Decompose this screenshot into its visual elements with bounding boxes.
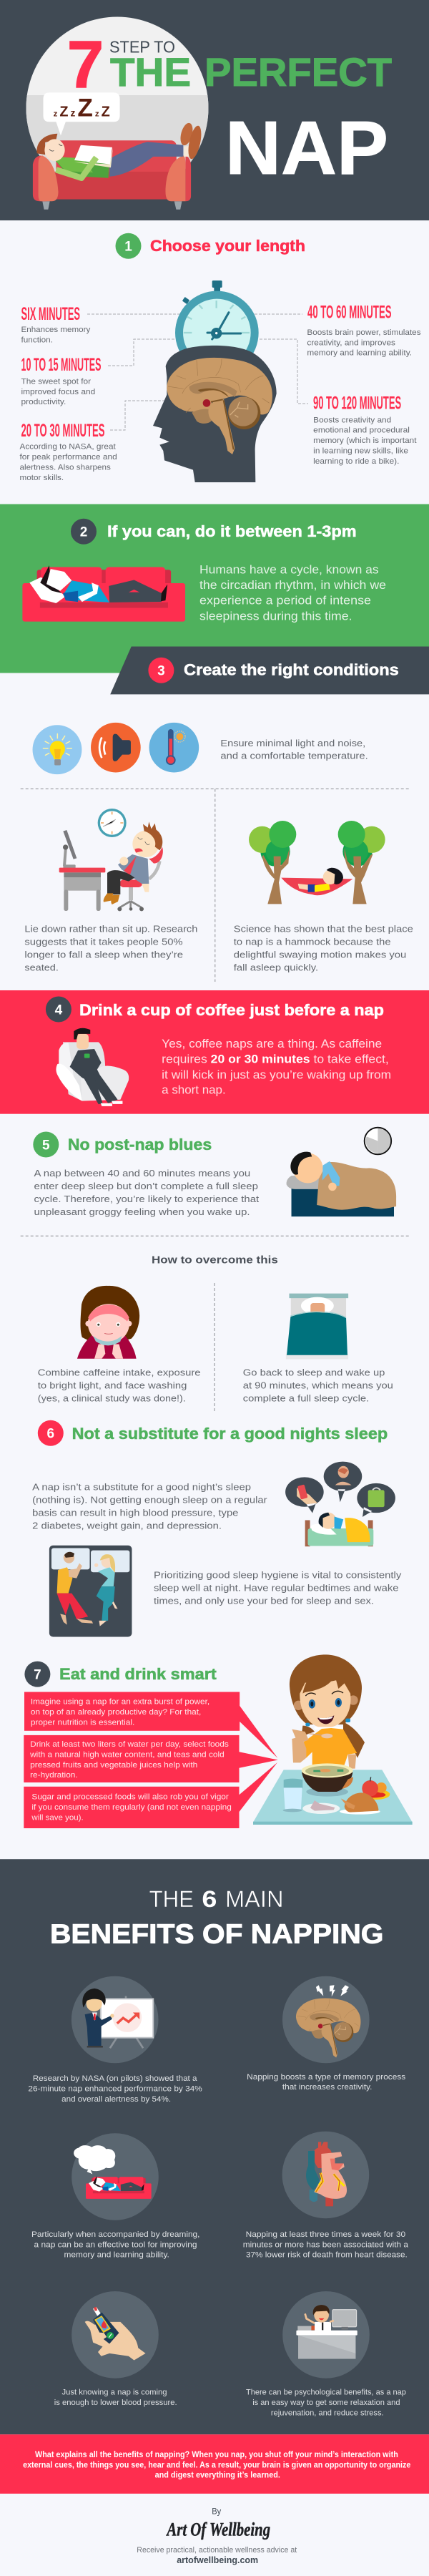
step 4 text: requires 20 or 30 minutes to take effect, bbox=[162, 1052, 389, 1066]
connector lines bbox=[87, 314, 308, 430]
benefit 6 text: rejuvenation, and reduce stress. bbox=[271, 2409, 384, 2417]
block: six minutes: function. bbox=[21, 336, 53, 344]
illustration: man napping on sofa bbox=[33, 92, 204, 210]
step 3 text: minimal light and noise: and a comfortable temperature. bbox=[220, 751, 368, 761]
block: 90 to 120 minutes: Boosts creativity and bbox=[313, 416, 391, 425]
benefit 1 text: Research by NASA (on pilots) showed that a bbox=[33, 2074, 197, 2083]
benefits title: 6 bbox=[202, 1886, 217, 1912]
benefit 3 text: Particularly when accompanied by dreaming, bbox=[31, 2230, 199, 2239]
benefit 5 text bbox=[54, 2389, 177, 2407]
block: 20 to 30 minutes: alertness. Also sharpens bbox=[20, 464, 111, 472]
benefit 4 text: Napping at least three times a week for 30 bbox=[246, 2230, 405, 2239]
benefits title: BENEFITS OF NAPPING bbox=[50, 1920, 383, 1950]
benefit 1 text: 26-minute nap enhanced performance by 34% bbox=[28, 2084, 202, 2093]
callout: sugar bbox=[24, 1762, 277, 1828]
text: back to sleep bbox=[243, 1367, 393, 1403]
step 2 text bbox=[199, 562, 386, 623]
block: 10 to 15 minutes bbox=[21, 355, 102, 406]
block: 20 to 30 minutes: According to NASA, great bbox=[20, 442, 116, 451]
benefits title bbox=[50, 1886, 383, 1950]
benefit 5 text: is enough to lower blood pressure. bbox=[54, 2399, 177, 2407]
title: the: THE bbox=[110, 49, 191, 94]
text: caffeine and face washing: Combine caffeine intake, exposure bbox=[38, 1367, 200, 1378]
header panel bbox=[0, 0, 429, 220]
footer: Art Of Wellbeing bbox=[166, 2519, 270, 2540]
text: lie down: longer to fall a sleep when they’re bbox=[24, 949, 183, 960]
callout: water bbox=[24, 1735, 278, 1782]
text: hammock: delightful swaying motion makes you bbox=[234, 949, 406, 960]
benefit 4 text: minutes or more has been associated with a bbox=[243, 2240, 409, 2249]
panel: conclusion: What explains all the benefits of napping? When you nap, you shut off your mind’s interaction with bbox=[35, 2449, 398, 2459]
block: 10 to 15 minutes: The sweet spot for bbox=[21, 378, 91, 386]
block: 40 to 60 minutes: Boosts brain power, stimulates bbox=[307, 328, 421, 337]
step 1 heading: Choose your length bbox=[150, 237, 305, 255]
step 4 heading: Drink a cup of coffee just before a nap bbox=[79, 1001, 384, 1019]
block: 10 to 15 minutes: productivity. bbox=[21, 398, 66, 406]
step 3 heading ribbon: Create the right conditions bbox=[184, 660, 399, 678]
benefit 3 text: memory and learning ability. bbox=[64, 2251, 169, 2260]
step 2 text: the circadian rhythm, in which we bbox=[199, 578, 386, 592]
callout: burst of power: on top of an already productive day? For that, bbox=[31, 1708, 201, 1717]
step 4 text: it will kick in just as you’re waking up from bbox=[162, 1068, 391, 1081]
step 7 heading bbox=[24, 1662, 217, 1687]
step 5 text: cycle. Therefore, you’re likely to experience that bbox=[34, 1194, 259, 1204]
benefit 3 text bbox=[31, 2230, 199, 2260]
step 3 heading ribbon bbox=[110, 647, 429, 694]
step 2 text: sleepiness during this time. bbox=[199, 609, 352, 623]
title: nap: NAP bbox=[225, 106, 388, 190]
step 2 text: experience a period of intense bbox=[199, 594, 371, 608]
illustration: man asleep under blanket with clock bbox=[287, 1128, 396, 1216]
text: back to sleep: Go back to sleep and wake up bbox=[243, 1367, 385, 1378]
benefit 6 icon: man at office desk bbox=[282, 2291, 370, 2379]
panel: conclusion bbox=[0, 2434, 429, 2494]
step 4 text bbox=[162, 1037, 391, 1097]
subheading: how to overcome this: How to overcome this bbox=[152, 1254, 278, 1267]
block: 20 to 30 minutes: motor skills. bbox=[20, 474, 64, 482]
icon: light bulb bbox=[33, 725, 82, 774]
footer: Receive practical, actionable wellness advice at bbox=[137, 2546, 297, 2555]
text: hammock: to nap is a hammock because the bbox=[234, 936, 390, 947]
block: 90 to 120 minutes: emotional and procedural bbox=[313, 426, 410, 435]
step 4 text: Yes, coffee naps are a thing. As caffeine bbox=[162, 1037, 382, 1050]
callout: sugar: if you consume them regularly (and not even napping bbox=[31, 1803, 232, 1812]
panel: step 2 bbox=[0, 504, 429, 673]
panel: benefits bbox=[0, 1859, 429, 2434]
title: step to: STEP TO bbox=[109, 37, 175, 56]
step 5 text: A nap between 40 and 60 minutes means you bbox=[34, 1168, 250, 1179]
benefit 4 text: 37% lower risk of death from heart disease. bbox=[246, 2251, 408, 2260]
step 3 text: minimal light and noise: Ensure minimal light and noise, bbox=[220, 738, 365, 748]
block: 40 to 60 minutes: creativity, and improves bbox=[307, 339, 396, 348]
benefit 4 text bbox=[243, 2230, 409, 2260]
step 6 text: not a substitute bbox=[32, 1481, 267, 1531]
benefit 1 text: and overall alertness by 54%. bbox=[61, 2095, 171, 2104]
benefit 6 text: There can be psychological benefits, as a nap bbox=[246, 2389, 406, 2397]
footer: By bbox=[212, 2507, 221, 2517]
step 6 heading: 6 bbox=[47, 1427, 54, 1442]
step 6 text: sleep hygiene: sleep well at night. Have regular bedtimes and wake bbox=[154, 1583, 399, 1594]
block: 40 to 60 minutes: memory and learning ability. bbox=[307, 349, 412, 358]
step 2 heading bbox=[71, 519, 357, 545]
benefit 1 icon: presenter with chart bbox=[72, 1976, 159, 2063]
benefit 2 text: Napping boosts a type of memory process bbox=[247, 2073, 406, 2082]
block: 10 to 15 minutes: 10 TO 15 MINUTES bbox=[21, 355, 102, 375]
step 6 heading: Not a substitute for a good nights sleep bbox=[72, 1425, 388, 1443]
step 6 text: not a substitute: (nothing is). Not getting enough sleep on a regular bbox=[32, 1494, 267, 1505]
illustration: man with coffee in armchair bbox=[56, 1028, 129, 1106]
hero circle bbox=[26, 17, 209, 172]
block: 90 to 120 minutes: in learning new skills, like bbox=[313, 447, 408, 456]
step 6 text: sleep hygiene: times, and only use your bed for sleep and sex. bbox=[154, 1596, 374, 1606]
benefit 6 text: is an easy way to get some relaxation and bbox=[252, 2399, 400, 2407]
text: lie down: seated. bbox=[24, 962, 59, 973]
step 4 heading: 4 bbox=[55, 1002, 63, 1018]
benefit 6 text bbox=[246, 2389, 406, 2417]
step 1 heading: 1 bbox=[124, 239, 132, 255]
illustration: woman washing face bbox=[77, 1286, 139, 1359]
benefit 2 text: that increases creativity. bbox=[282, 2083, 372, 2092]
illustration: girl eating soup at table bbox=[253, 1654, 413, 1825]
benefit 2 icon: brain with sparks bbox=[282, 1976, 370, 2063]
block: 90 to 120 minutes bbox=[313, 393, 416, 466]
text: hammock: Science has shown that the best place bbox=[234, 924, 413, 935]
block: 90 to 120 minutes: memory (which is important bbox=[313, 436, 416, 445]
speech bubble: snoring bbox=[43, 92, 120, 135]
benefits title: MAIN bbox=[225, 1886, 283, 1912]
step 6 text: not a substitute: A nap isn’t a substitute for a good night’s sleep bbox=[32, 1481, 251, 1492]
step 4 text: a short nap. bbox=[162, 1083, 226, 1097]
block: six minutes: Enhances memory bbox=[21, 326, 91, 334]
block: 40 to 60 minutes bbox=[307, 303, 421, 358]
callout: burst of power: proper nutrition is essential. bbox=[31, 1719, 134, 1727]
illustration: boy in hammock between trees bbox=[249, 821, 385, 904]
callout: burst of power: Imagine using a nap for an extra burst of power, bbox=[31, 1698, 209, 1707]
step 6 text: sleep hygiene bbox=[154, 1570, 402, 1606]
illustration: couple sleeping in bed bbox=[49, 1546, 132, 1636]
illustration: person in bed under teal blanket bbox=[286, 1294, 348, 1359]
text: lie down: suggests that it takes people 50% bbox=[24, 936, 183, 947]
block: six minutes bbox=[21, 304, 91, 344]
step 6 text: sleep hygiene: Prioritizing good sleep hygiene is vital to consistently bbox=[154, 1570, 402, 1581]
benefit 3 text: a nap can be an effective tool for improving bbox=[34, 2240, 197, 2249]
benefit 2 text bbox=[247, 2073, 406, 2092]
illustration: man asleep at desk bbox=[59, 809, 163, 911]
step 5 text bbox=[34, 1168, 259, 1217]
step 5 text: unpleasant groggy feeling when you wake up. bbox=[34, 1206, 250, 1217]
title: perfect: PERFECT bbox=[204, 49, 392, 94]
step 1 heading bbox=[116, 233, 305, 259]
callout: sugar: Sugar and processed foods will also rob you of vigor bbox=[31, 1792, 229, 1801]
text: back to sleep: at 90 minutes, which means you bbox=[243, 1380, 393, 1390]
text: lie down bbox=[24, 924, 197, 973]
step 4 heading bbox=[46, 996, 384, 1022]
step 6 heading bbox=[38, 1420, 388, 1446]
step 2 text: Humans have a cycle, known as bbox=[199, 562, 379, 576]
callout: water: with a natural high water content, and teas and cold bbox=[29, 1750, 225, 1759]
footer bbox=[137, 2507, 297, 2565]
step 6 text: not a substitute: basis can result in high blood pressure, type bbox=[32, 1507, 238, 1518]
text: lie down: Lie down rather than sit up. Research bbox=[24, 924, 197, 935]
step 7 heading: Eat and drink smart bbox=[59, 1665, 217, 1683]
benefit 5 text: Just knowing a nap is coming bbox=[61, 2389, 167, 2397]
title: 7: 7 bbox=[67, 27, 104, 102]
illustration: man on red sofa bbox=[22, 565, 185, 622]
block: 20 to 30 minutes: 20 TO 30 MINUTES bbox=[21, 421, 104, 441]
text: back to sleep: complete a full sleep cycle. bbox=[243, 1392, 369, 1403]
text: hammock: fall asleep quickly. bbox=[234, 962, 318, 973]
benefit 4 icon: heart bbox=[282, 2132, 369, 2218]
block: 90 to 120 minutes: learning to ride a bike). bbox=[313, 457, 399, 466]
text: caffeine and face washing bbox=[38, 1367, 200, 1403]
text: hammock bbox=[234, 924, 413, 973]
benefit 5 icon: hand with blood pressure meter bbox=[72, 2291, 159, 2379]
step 5 heading bbox=[33, 1132, 212, 1158]
step 3 heading ribbon: 3 bbox=[157, 664, 165, 679]
block: 20 to 30 minutes: for peak performance and bbox=[20, 453, 117, 462]
callout: water: pressed fruits and vegetable juices help with bbox=[30, 1761, 197, 1770]
step 2 heading: 2 bbox=[80, 525, 87, 540]
block: six minutes: SIX MINUTES bbox=[21, 304, 80, 324]
step 5 heading: No post-nap blues bbox=[68, 1136, 212, 1153]
callout: water: Drink at least two liters of water per day, select foods bbox=[30, 1740, 229, 1749]
callout: water: re-hydration. bbox=[30, 1771, 78, 1780]
step 5 text: enter deep sleep but don’t complete a full sleep bbox=[34, 1181, 258, 1191]
benefits title: THE bbox=[149, 1886, 194, 1912]
icon: speaker bbox=[91, 723, 141, 772]
block: 10 to 15 minutes: improved focus and bbox=[21, 388, 95, 396]
step 5 heading: 5 bbox=[42, 1138, 50, 1153]
block: 20 to 30 minutes bbox=[20, 421, 117, 482]
callout: sugar: will save you). bbox=[31, 1813, 84, 1822]
speech bubble: snoring: zZzZzZ bbox=[54, 94, 110, 122]
step 2 heading: If you can, do it between 1-3pm bbox=[107, 522, 357, 540]
icon: thermometer bbox=[149, 723, 199, 772]
panel: conclusion: and digest everything it’s learned. bbox=[155, 2470, 280, 2480]
step 7 heading: 7 bbox=[34, 1667, 41, 1682]
text: caffeine and face washing: (yes, a clinical study was done!). bbox=[38, 1392, 186, 1403]
panel: step 4 coffee bbox=[0, 990, 429, 1114]
illustration: sleeper with health thought bubbles bbox=[285, 1462, 395, 1546]
benefit 1 text bbox=[28, 2074, 202, 2104]
benefit 3 icon: dreaming on sofa bbox=[72, 2133, 159, 2220]
text: caffeine and face washing: to bright light, and face washing bbox=[38, 1380, 187, 1390]
step 6 text: not a substitute: 2 diabetes, weight gain, and depression. bbox=[32, 1520, 222, 1531]
illustration: stopwatch and head with brain bbox=[153, 280, 277, 482]
footer: artofwellbeing.com bbox=[177, 2555, 258, 2565]
callout: burst of power bbox=[24, 1692, 277, 1758]
step 3 text: minimal light and noise bbox=[220, 738, 368, 761]
